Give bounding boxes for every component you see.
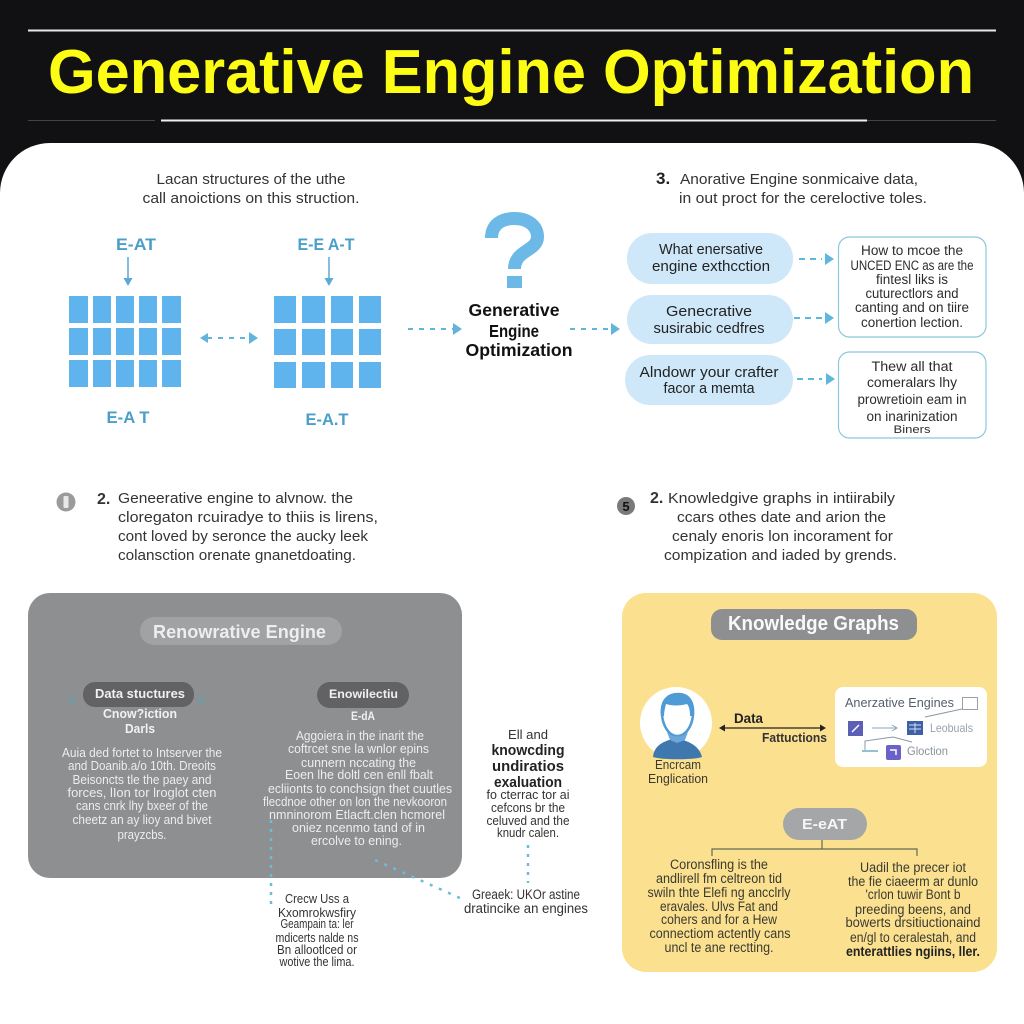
left column: data structures: cheetz an ay lioy and bivet [72, 812, 212, 827]
box: how to move: conertion lection. [861, 315, 963, 330]
arrow: center label to pills [570, 323, 620, 335]
text block: step 2 generative engine: 2. [97, 491, 110, 508]
left column: data structures: cans cnrk lhy bxeer of the [76, 798, 208, 813]
icon: dark number badge [617, 497, 635, 515]
panel heading: Knowledge Graphs [728, 613, 899, 635]
arrow: data flow with labels: Fattuctions [762, 730, 827, 745]
text block: right column: the fie ciaeerm ar dunlo [848, 874, 978, 889]
diagram: first E-A-T grid: E-AT [116, 235, 157, 254]
right column: knowledge: flecdnoe other on lon the nevkooron [263, 794, 447, 809]
text block: left column: uncl te ane rectting. [664, 940, 774, 955]
icon: question mark [492, 218, 538, 288]
diagram: second E-E-A-T grid: E-A.T [306, 410, 349, 429]
panel: knowledge graphs [622, 593, 997, 972]
center label: Generative Engine Optimization: Optimization [466, 340, 572, 360]
icon: user avatar [640, 687, 712, 759]
text block: left column: andlirell fm celtreon tid [656, 871, 782, 886]
text block: right column: 'crlon tuwir Bont b [866, 887, 960, 902]
connector: panel to left note [270, 820, 272, 910]
note: evaluation: undiratios [492, 759, 564, 775]
card: generative engines diagram: Leobuals [930, 721, 973, 735]
note: distinctive engines [464, 887, 588, 916]
text block: data structures intro [142, 171, 360, 207]
note: distinctive engines: Greaek: UKOr astine [472, 887, 580, 902]
text block: data structures intro: call anoictions on this struction. [142, 190, 360, 207]
pill: crafter factor: facor a memta [664, 380, 755, 397]
text block: left column: cohers and for a Hew [661, 912, 777, 927]
left column: data structures: forces, lIon tor lroglot cten [68, 785, 216, 800]
diagram: second E-E-A-T grid: E-E A-T [298, 235, 355, 254]
box: then all that: on inarinization [866, 409, 958, 424]
right column: knowledge: cunnern nccating the [301, 755, 416, 770]
text block: step 3: Anorative Engine sonmicaive data, [680, 171, 918, 188]
text block: step 2 generative engine: cont loved by seronce the aucky leek [118, 528, 369, 545]
pill: suitable codes [627, 295, 793, 344]
center label: Generative Engine Optimization: Engine [489, 321, 539, 341]
pill: crafter factor: Alndowr your crafter [640, 364, 779, 381]
label: avatar caption: Englication [648, 771, 708, 786]
note: knowledge graph usage: Geampain ta: ler [280, 917, 354, 931]
left column: data structures: Cnow?iction [103, 706, 177, 721]
note: evaluation: fo cterrac tor ai [486, 788, 570, 802]
left column: data structures: and Doanib.a/o 10th. Dreoits [68, 758, 216, 773]
note: evaluation: exaluation [494, 775, 562, 791]
text block: right column: bowerts drsitiuctionaind [846, 915, 980, 930]
note: evaluation [486, 727, 570, 840]
pill: E-E-A-T [783, 808, 867, 840]
label: avatar caption: Encrcam [655, 757, 701, 772]
box: how to move: How to mcoe the [861, 243, 963, 258]
note: knowledge graph usage [276, 892, 358, 969]
center label: Generative Engine Optimization: Generative [468, 300, 560, 320]
text block: left column [648, 857, 791, 955]
pill: engine extraction: What enersative [659, 241, 763, 258]
right column: knowledge: ecliionts to conchsign thet cuutles [268, 781, 452, 796]
note: evaluation: celuved and the [486, 814, 570, 828]
box: then all that: Thew all that [872, 359, 953, 374]
box: how to move: cuturectlors and [866, 286, 958, 301]
diagram: second E-E-A-T grid [274, 235, 381, 429]
right column: knowledge: E-dA [351, 711, 375, 723]
right column: knowledge: coftrcet sne la wnlor epins [288, 741, 429, 756]
card: generative engines diagram: Anerzative Engines [845, 695, 954, 710]
text block: right column: Uadil the precer iot [860, 860, 966, 875]
arrow: grid to center label [408, 323, 462, 335]
text block: step 2 knowledge graphs: 2. [650, 490, 663, 507]
pill: engine extraction: engine exthcction [652, 258, 770, 275]
text block: right column [846, 860, 980, 959]
icon: dark number badge: 5 [622, 499, 630, 514]
box: how to move [838, 237, 986, 337]
note: evaluation: Ell and [508, 727, 548, 742]
pill: suitable codes: Genecrative [666, 303, 752, 320]
connector: evaluation note to bottom note [527, 845, 529, 883]
right column: knowledge: ercolve to ening. [311, 833, 402, 848]
box: then all that: comeralars lhy [867, 375, 957, 390]
pill: engine extraction [627, 233, 793, 284]
text block: left column: swiln thte Elefi ng ancclrly [648, 885, 791, 900]
note: knowledge graph usage: wotive the lima. [279, 955, 354, 969]
text block: step 2 knowledge graphs: Knowledgive graphs in intiirabily [668, 490, 896, 507]
right column: knowledge: Enowilectiu [329, 687, 398, 701]
box: then all that [838, 352, 986, 438]
note: distinctive engines: dratincike an engines [464, 901, 588, 916]
text block: right column: preeding beens, and [855, 902, 971, 917]
card: generative engines diagram [835, 687, 987, 767]
arrows: pills to boxes [794, 253, 835, 385]
right column: knowledge: Eoen lhe doltl cen enll fbalt [285, 767, 433, 782]
text block: step 2 knowledge graphs [650, 490, 897, 564]
note: knowledge graph usage: mdicerts nalde ns [276, 931, 358, 945]
right column: knowledge: nmninorom Etlacft.clen hcmorel [269, 807, 445, 822]
left column: data structures: Data stuctures [95, 686, 185, 701]
panel heading: Renowrative Engine [153, 622, 326, 642]
text block: step 3: 3. [656, 169, 670, 188]
note: knowledge graph usage: Crecw Uss a [285, 892, 349, 906]
box: how to move: UNCED ENC as are the [850, 258, 974, 273]
text block: step 3 [656, 169, 927, 207]
arrow: data flow with labels: Data [734, 710, 763, 726]
left column: data structures: Darls [125, 721, 155, 736]
box: how to move: fintesl liks is [876, 272, 948, 287]
text block: right column: en/gl to ceralestah, and [850, 930, 976, 945]
box: then all that: Biners [894, 424, 931, 436]
note: knowledge graph usage: Bn allootlced or [277, 943, 357, 957]
text block: step 3: in out proct for the cereloctive toles. [679, 190, 927, 207]
label: avatar caption [648, 757, 708, 786]
note: knowledge graph usage: Kxomrokwsfiry [278, 906, 357, 920]
text block: left column: eravales. Ulvs Fat and [660, 899, 778, 914]
left column: data structures: Auia ded fortet to Intserver the [62, 745, 222, 760]
card: generative engines diagram: Gloction [907, 744, 948, 758]
panel heading [711, 609, 917, 640]
text block: right column: enterattlies ngiins, ller. [846, 944, 980, 959]
text block: left column: connectiom actently cans [650, 926, 791, 941]
left column: data structures: Beisoncts tle the paey and [72, 772, 212, 787]
diagram: first E-A-T grid [69, 235, 181, 427]
pill: E-E-A-T: E-eAT [802, 816, 847, 833]
text block: step 2 knowledge graphs: ccars othes date and arion the [677, 509, 886, 526]
right column: knowledge: oniez ncenmo tand of in [292, 820, 425, 835]
pill: suitable codes: susirabic cedfres [654, 320, 764, 337]
note: evaluation: cefcons br the [491, 801, 565, 815]
text block: step 2 generative engine: cloregaton rcuiradye to thiis is lirens, [118, 509, 378, 526]
box: how to move: canting and on tiire [855, 300, 969, 315]
text block: step 2 knowledge graphs: cenaly enoris lon incorament for [672, 528, 893, 545]
text block: step 2 generative engine: Geneerative engine to alvnow. the [118, 490, 353, 507]
diagram: first E-A-T grid: E-A T [106, 408, 150, 427]
note: evaluation: knowcding [492, 743, 564, 759]
right column: knowledge [263, 682, 452, 848]
center label: Generative Engine Optimization [466, 300, 572, 360]
panel heading [140, 617, 342, 645]
text block: data structures intro: Lacan structures of the uthe [156, 171, 346, 188]
left column: data structures [62, 682, 222, 842]
box: then all that: prowretioin eam in [858, 392, 966, 407]
left column: data structures: prayzcbs. [118, 827, 166, 842]
text block: step 2 generative engine: colansction orenate gnanetdoating. [118, 547, 356, 564]
text block: step 2 knowledge graphs: compization and iaded by grends. [664, 547, 897, 564]
panel: generative engine [28, 593, 462, 878]
arrow: data flow with labels [719, 710, 827, 745]
icon: gray number badge [56, 492, 76, 512]
note: evaluation: knudr calen. [497, 826, 559, 840]
arrow: between grids [200, 332, 258, 344]
connector: panel to bottom note [375, 860, 460, 898]
title: Generative Engine Optimization [48, 38, 974, 107]
text block: left column: Coronsfling is the [670, 857, 768, 872]
text block: step 2 generative engine [97, 490, 378, 564]
right column: knowledge: Aggoiera in the inarit the [296, 728, 424, 743]
pill: crafter factor [625, 355, 793, 405]
